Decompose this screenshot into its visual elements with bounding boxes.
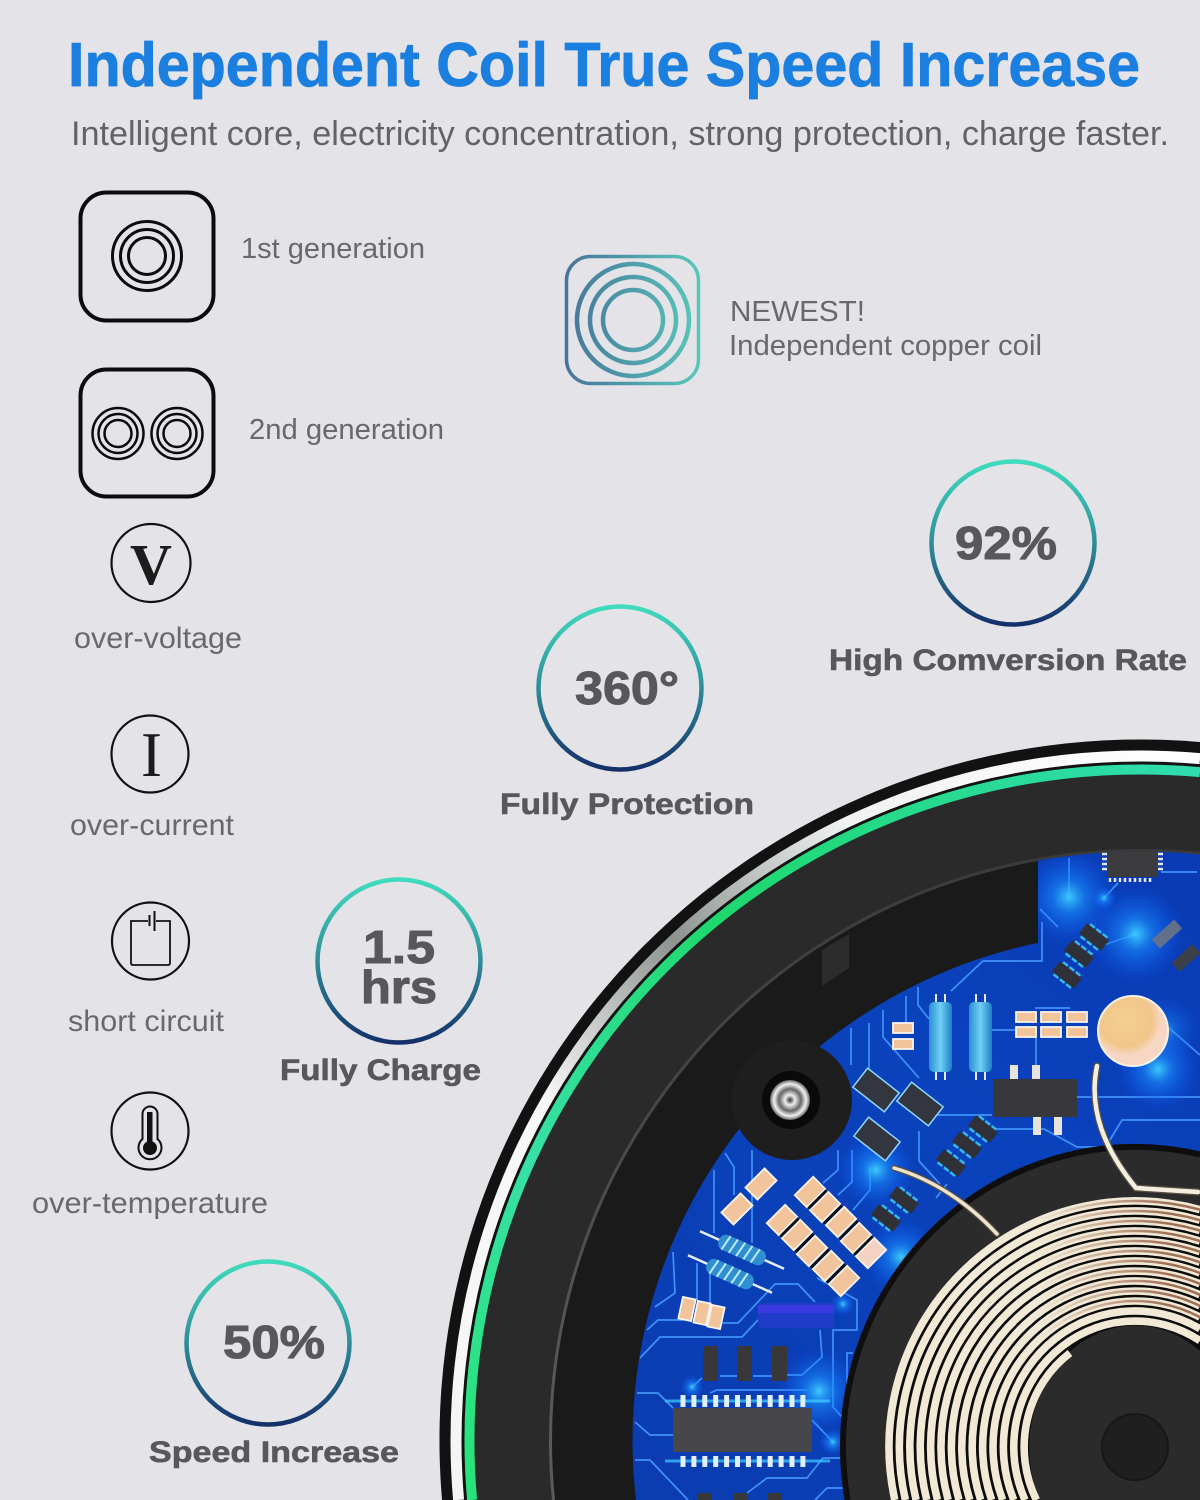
coin battery bbox=[1098, 996, 1168, 1066]
blue cylinder bbox=[758, 1303, 834, 1328]
label: Fully Charge: Fully Charge bbox=[280, 1054, 481, 1087]
coil base bbox=[843, 1147, 1200, 1500]
icon: 2nd generation coil bbox=[80, 370, 214, 496]
badge: 1.5 hrs: 1.5 bbox=[363, 921, 435, 973]
circuit traces bbox=[635, 858, 1200, 1500]
label: newest copper coil: Independent copper coil bbox=[729, 330, 1042, 362]
coil backing bbox=[885, 1197, 1200, 1500]
label: High Comversion Rate: High Comversion Rate bbox=[829, 644, 1187, 677]
label: Fully Protection: Fully Protection bbox=[500, 788, 754, 821]
glow spots bbox=[680, 849, 1200, 1456]
badge: 50%: 50% bbox=[223, 1316, 325, 1368]
label: over-temperature: over-temperature bbox=[32, 1187, 268, 1220]
subtitle: Intelligent core, electricity concentration, strong protection, charge faster. bbox=[71, 115, 1169, 153]
badge: 1.5 hrs bbox=[318, 880, 480, 1042]
capacitors bbox=[929, 994, 992, 1080]
diamond chips bbox=[853, 1068, 943, 1161]
transistor bbox=[993, 1065, 1077, 1135]
label: Speed Increase: Speed Increase bbox=[149, 1436, 399, 1469]
title: Independent Coil True Speed Increase bbox=[68, 31, 1140, 100]
black parts bbox=[698, 1346, 787, 1500]
icon: over-current: I bbox=[141, 720, 162, 790]
icon: over-voltage bbox=[112, 524, 190, 602]
icon: short circuit bbox=[112, 902, 189, 980]
icon: over-voltage: V bbox=[130, 532, 172, 597]
screw mount bbox=[732, 1040, 852, 1160]
gray parts bbox=[1152, 920, 1200, 972]
badge: 360 degrees: 360° bbox=[575, 662, 679, 714]
top chip bbox=[1102, 850, 1163, 882]
small ICs bbox=[869, 921, 1111, 1234]
circuit board bbox=[630, 849, 1200, 1500]
label: 1st generation: 1st generation bbox=[241, 233, 425, 265]
badge: 1.5 hrs: hrs bbox=[361, 961, 437, 1013]
label: over-current: over-current bbox=[70, 809, 235, 842]
label: over-voltage: over-voltage bbox=[74, 622, 242, 655]
charger housing rings bbox=[439, 739, 1200, 1500]
icon: over-temperature bbox=[112, 1092, 188, 1170]
wireless charger cutaway bbox=[439, 739, 1200, 1500]
label: newest copper coil: NEWEST! bbox=[730, 296, 865, 328]
icon: newest independent coil bbox=[566, 256, 698, 384]
label: short circuit: short circuit bbox=[68, 1005, 225, 1038]
solder pads bbox=[678, 1012, 1087, 1329]
badge: 92% bbox=[932, 462, 1094, 624]
icon: over-current bbox=[112, 716, 188, 792]
badge: 92%: 92% bbox=[955, 517, 1057, 569]
main IC chip bbox=[665, 1395, 830, 1467]
coil centre hole bbox=[1102, 1414, 1168, 1480]
badge: 360 degrees bbox=[538, 606, 702, 770]
label: 2nd generation: 2nd generation bbox=[249, 414, 444, 446]
resistors bbox=[688, 1230, 784, 1294]
icon: 1st generation coil bbox=[80, 192, 214, 320]
label: newest copper coil bbox=[729, 296, 1042, 362]
coil lead wires bbox=[894, 1066, 1198, 1234]
badge: 50% bbox=[186, 1262, 350, 1424]
pad gaps bbox=[780, 1190, 872, 1282]
copper coil bbox=[889, 1201, 1200, 1500]
copper tint on coil bbox=[1040, 1201, 1200, 1338]
